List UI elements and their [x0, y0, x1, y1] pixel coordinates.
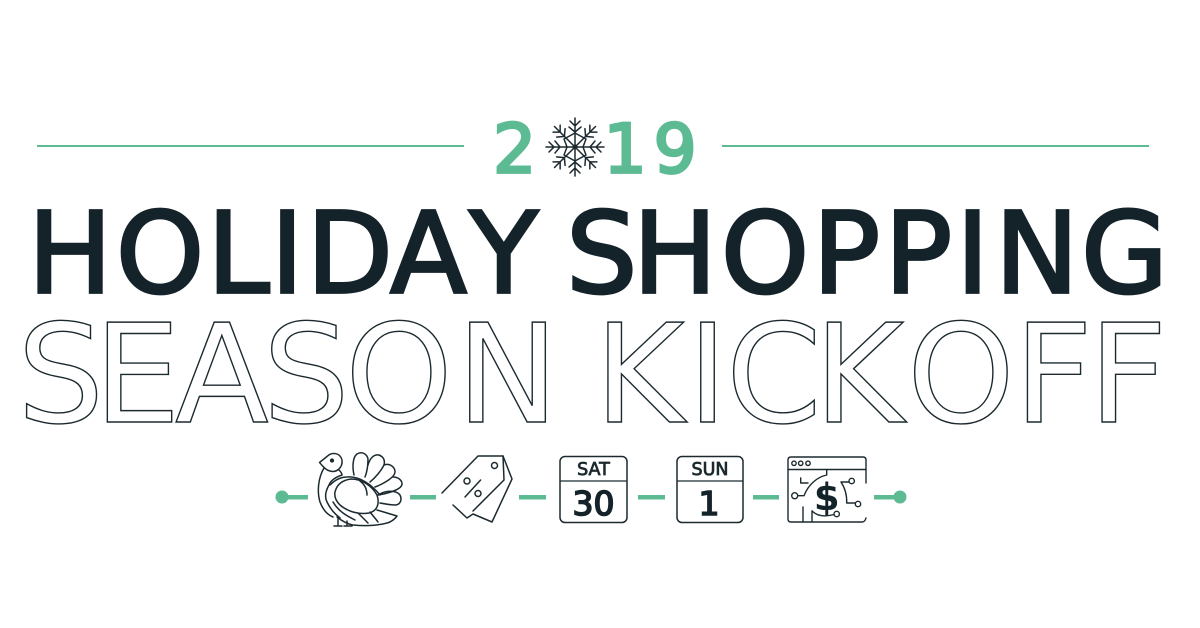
icon: snowflake	[546, 118, 604, 176]
icon: online shopping browser: $	[814, 476, 840, 519]
icon: calendar saturday 30	[560, 456, 627, 523]
icon: calendar sunday 1: SUN	[691, 460, 729, 480]
icon: calendar saturday 30: 30	[572, 484, 614, 523]
title: holiday shopping: HOLIDAY SHOPPING	[28, 188, 1168, 320]
icon: price tags	[442, 456, 512, 522]
icon: online shopping browser	[788, 457, 866, 522]
timeline connector	[276, 490, 906, 504]
icon: calendar sunday 1	[677, 456, 743, 523]
title: season kickoff: SEASON KICKOFF	[17, 296, 1167, 455]
icon: calendar sunday 1: 1	[698, 484, 720, 523]
year header with rules	[37, 110, 1149, 190]
year 2019: 219	[493, 110, 697, 190]
icon: calendar saturday 30: SAT	[577, 460, 610, 480]
icon: turkey	[318, 453, 402, 526]
